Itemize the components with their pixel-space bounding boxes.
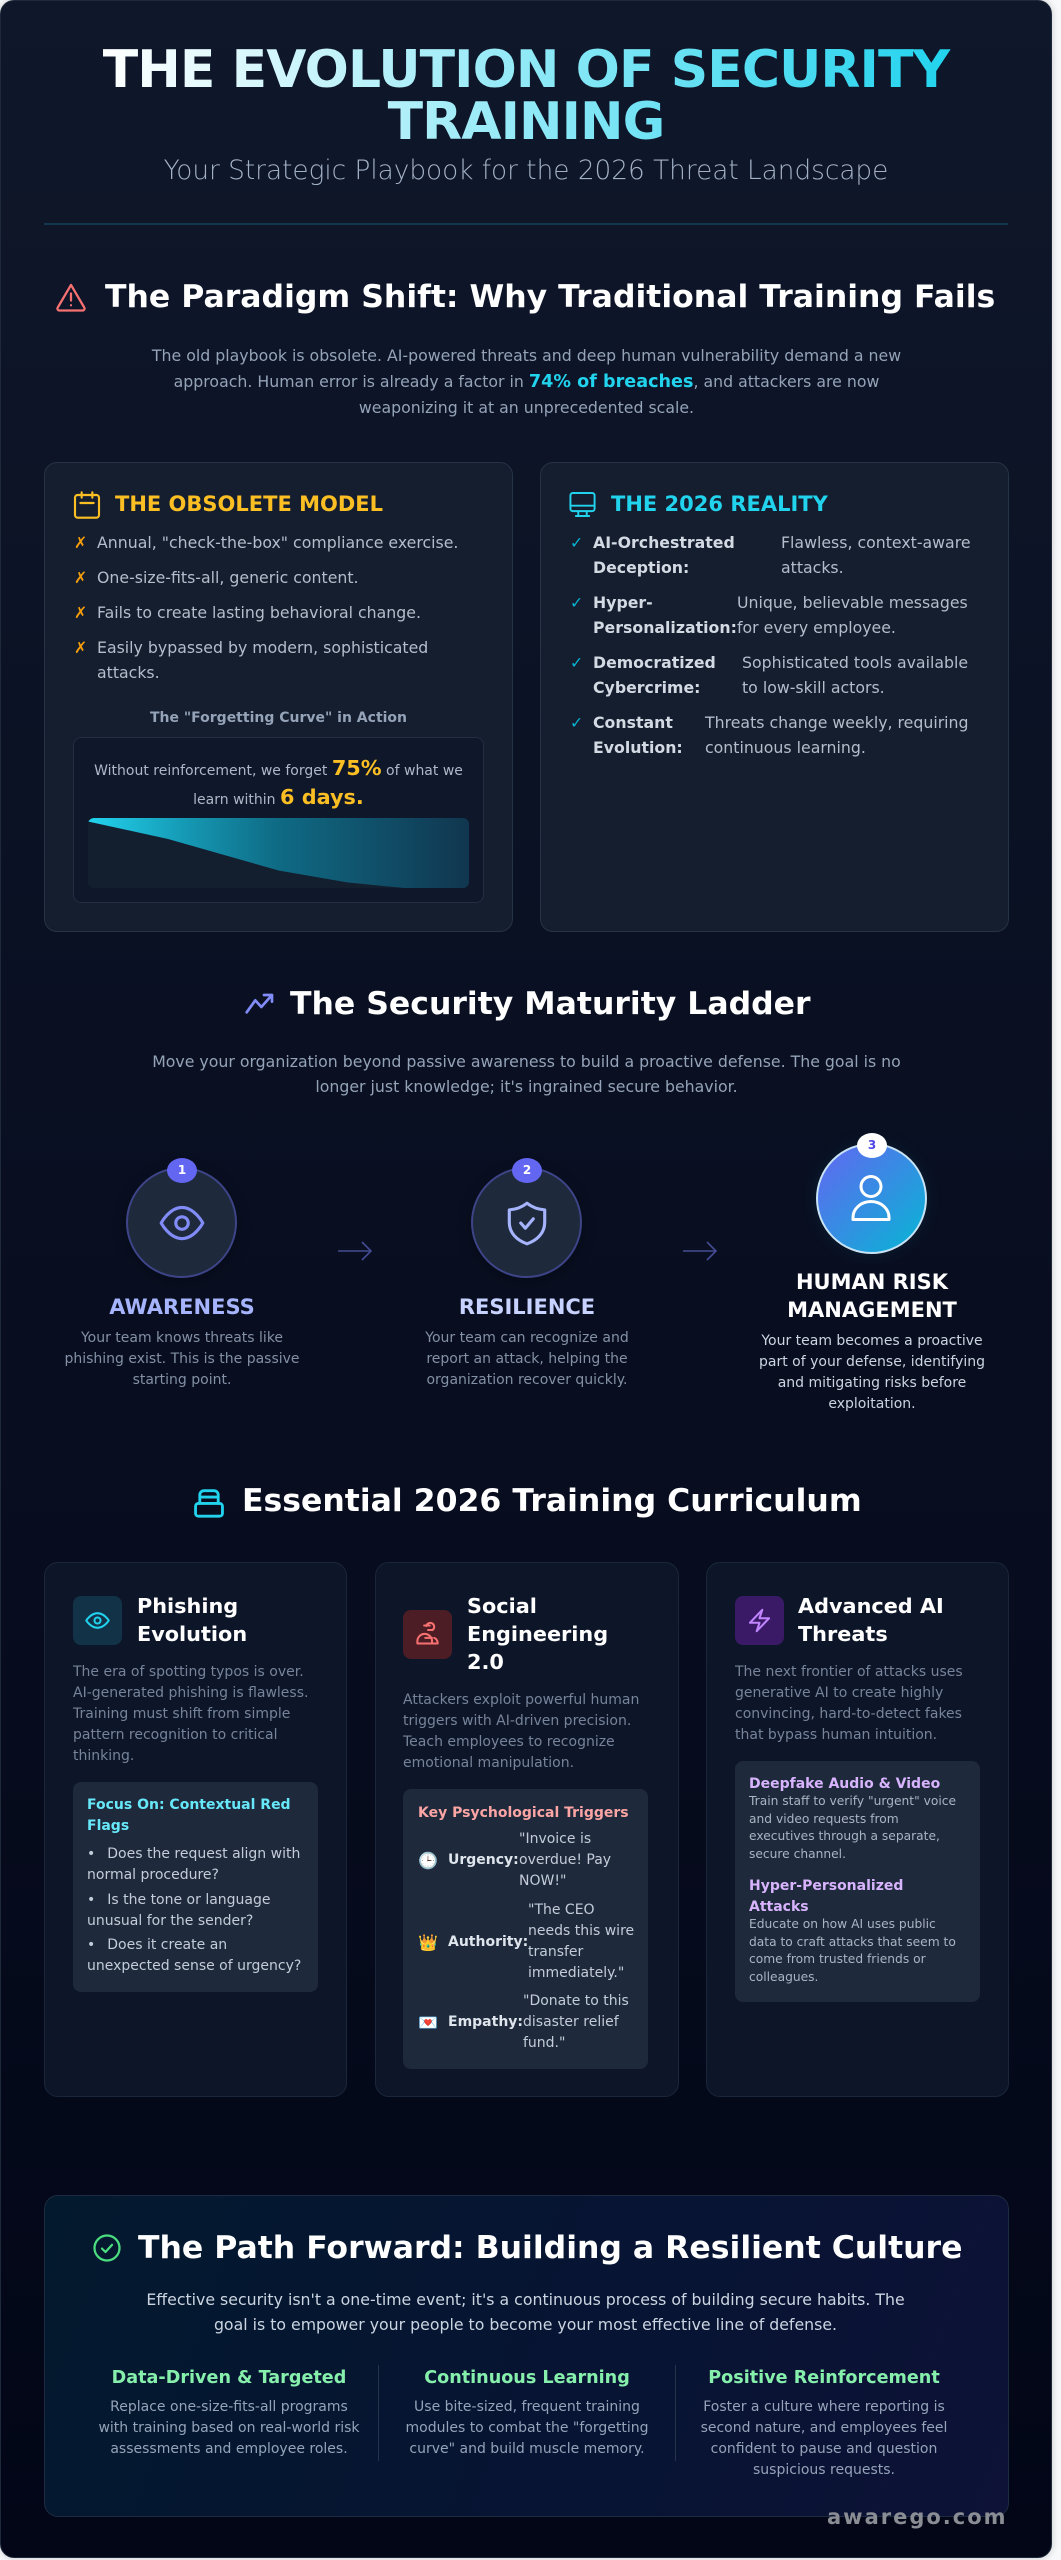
threat: deepfake: Deepfake Audio & Video <box>749 1776 940 1792</box>
threat: hyper-personalized: colleagues. <box>749 1970 818 1984</box>
card title: 2.0 <box>467 1650 504 1674</box>
description: Your team knows threats like <box>81 1330 283 1346</box>
ladder intro <box>152 1052 901 1096</box>
reality list: ✓ <box>570 653 583 672</box>
card description <box>402 1692 639 1771</box>
badge 1 <box>167 1158 197 1183</box>
intro paragraph: weaponizing it at an unprecedented scale. <box>359 398 694 417</box>
card title: Advanced AI <box>798 1594 944 1618</box>
card description: Teach employees to recognize <box>403 1734 615 1750</box>
column: data-driven <box>98 2368 360 2457</box>
focus box: unusual for the sender? <box>87 1913 253 1929</box>
arrow <box>338 1242 372 1260</box>
trigger: empathy: 💌 <box>418 2013 438 2032</box>
focus box: • Does it create an <box>87 1937 227 1953</box>
card description: that bypass human intuition. <box>735 1727 937 1743</box>
failures list: Fails to create lasting behavioral change. <box>97 603 421 622</box>
callout text: learn within 6 days. <box>193 785 364 809</box>
column: data-driven: with training based on real-world risk <box>98 2420 360 2436</box>
column: positive reinforcement: Foster a culture where reporting is <box>703 2399 945 2415</box>
icon: calendar <box>74 491 100 519</box>
circle with user icon <box>816 1143 927 1254</box>
icon: eye <box>73 1596 122 1645</box>
column: continuous learning: curve" and build muscle memory. <box>409 2441 645 2457</box>
reality list: for every employee. <box>737 618 896 636</box>
title <box>103 40 951 152</box>
trigger: empathy: "Donate to this <box>523 1993 629 2009</box>
threat: hyper-personalized: data to craft attacks that seem to <box>749 1934 956 1948</box>
ladder intro: longer just knowledge; it's ingrained secure behavior. <box>315 1077 738 1096</box>
reality list: Sophisticated tools available <box>742 653 968 672</box>
card title: Social <box>467 1594 537 1618</box>
reality list: Threats change weekly, requiring <box>705 713 969 732</box>
trigger: urgency: NOW!" <box>519 1873 566 1889</box>
trigger: authority: needs this wire <box>528 1923 634 1939</box>
column: continuous learning <box>378 2366 676 2496</box>
card description: triggers with AI-driven precision. <box>403 1713 631 1729</box>
threat: deepfake: Train staff to verify "urgent" voice <box>749 1794 956 1808</box>
description: Your team can recognize and <box>425 1330 629 1346</box>
card description: Attackers exploit powerful human <box>403 1692 639 1708</box>
badge 1: 1 <box>178 1163 186 1177</box>
card description: emotional manipulation. <box>403 1755 574 1771</box>
reality list: Evolution: <box>593 738 683 756</box>
step 3: human risk management <box>759 1133 985 1412</box>
triggers box <box>403 1789 648 2069</box>
reality list: Hyper- <box>593 593 653 612</box>
intro paragraph: The old playbook is obsolete. AI-powered threats and deep human vulnerability demand a new <box>152 346 901 365</box>
trigger: authority: transfer <box>528 1944 583 1960</box>
focus list <box>87 1846 300 1883</box>
badge 3: 3 <box>868 1138 876 1152</box>
column: data-driven: Data-Driven & Targeted <box>112 2368 346 2388</box>
title: THE EVOLUTION OF SECURITY <box>103 40 949 100</box>
card: advanced AI threats <box>706 1562 1009 2097</box>
subtitle: Your Strategic Playbook for the 2026 Threat Landscape <box>164 156 888 186</box>
path paragraph: goal is to empower your people to become your most effective line of defense. <box>214 2315 837 2334</box>
watermark: awarego.com <box>827 2505 1008 2529</box>
threat: deepfake: executives through a separate, <box>749 1829 940 1843</box>
forgetting curve title: The "Forgetting Curve" in Action <box>150 710 407 726</box>
intro paragraph <box>152 346 901 417</box>
card description <box>734 1664 963 1743</box>
column: data-driven: assessments and employee roles. <box>110 2441 348 2457</box>
panel title: THE 2026 REALITY <box>611 492 828 516</box>
description: starting point. <box>133 1372 231 1388</box>
card title <box>798 1594 944 1646</box>
trigger: empathy <box>418 1993 629 2051</box>
threat: hyper-personalized <box>749 1878 956 1984</box>
trigger: urgency <box>418 1831 611 1889</box>
title: TRAINING <box>388 92 664 152</box>
column: positive reinforcement: suspicious requests. <box>753 2462 895 2478</box>
description: Your team becomes a proactive <box>761 1333 983 1349</box>
failures list: ✗ <box>74 638 87 657</box>
description <box>425 1330 629 1388</box>
failures list: ✗ <box>74 603 87 622</box>
badge 3 <box>857 1133 887 1158</box>
trigger: authority: 👑 <box>418 1933 438 1952</box>
column: positive reinforcement: second nature, and employees feel <box>701 2420 947 2436</box>
focus title: Flags <box>87 1818 129 1834</box>
arrow <box>683 1242 717 1260</box>
description: part of your defense, identifying <box>759 1354 985 1370</box>
trigger: authority: immediately." <box>528 1965 624 1981</box>
card description: thinking. <box>73 1748 134 1764</box>
heading: paradigm shift <box>56 279 995 315</box>
reality list: ✓ <box>570 533 583 552</box>
icon: check circle <box>93 2234 121 2262</box>
callout text: Without reinforcement, we forget 75% of what we <box>94 756 463 780</box>
threat: hyper-personalized: Attacks <box>749 1899 809 1915</box>
threats box <box>735 1761 980 2002</box>
card title: Engineering <box>467 1622 608 1646</box>
focus title: Focus On: Contextual Red <box>87 1797 291 1813</box>
reality list: to low-skill actors. <box>742 678 885 696</box>
card title <box>467 1594 608 1674</box>
panel title: THE OBSOLETE MODEL <box>115 492 383 516</box>
reality list <box>570 533 971 756</box>
focus box: unexpected sense of urgency? <box>87 1958 301 1974</box>
chart: forgetting curve <box>88 818 469 888</box>
column: positive reinforcement <box>675 2366 973 2496</box>
label: RESILIENCE <box>459 1295 595 1319</box>
circle with eye icon <box>126 1167 237 1278</box>
heading: curriculum <box>194 1483 862 1519</box>
threat: deepfake <box>748 1776 956 1860</box>
trigger: urgency: 🕒 <box>418 1851 438 1870</box>
card description: generative AI to create highly <box>735 1685 943 1701</box>
heading text: The Path Forward: Building a Resilient Culture <box>138 2230 962 2266</box>
icon: warning triangle <box>56 284 86 312</box>
card description: The era of spotting typos is over. <box>73 1664 304 1680</box>
trigger: authority: "The CEO <box>528 1902 595 1918</box>
heading: maturity ladder <box>245 986 811 1022</box>
column: positive reinforcement: Positive Reinforcement <box>708 2368 940 2388</box>
card title: Evolution <box>137 1622 247 1646</box>
threat: deepfake: secure channel. <box>749 1846 846 1860</box>
forgetting curve callout <box>73 737 484 903</box>
reality list: AI-Orchestrated <box>593 533 735 552</box>
trigger: empathy: fund." <box>523 2035 565 2051</box>
heading text: The Security Maturity Ladder <box>290 986 811 1022</box>
trigger: urgency: "Invoice is <box>519 1831 591 1847</box>
card description: Training must shift from simple <box>73 1706 290 1722</box>
label: HUMAN RISK <box>796 1270 948 1294</box>
card description: The next frontier of attacks uses <box>735 1664 963 1680</box>
description <box>64 1330 300 1388</box>
threat: hyper-personalized: Educate on how AI uses public <box>749 1917 936 1931</box>
triggers title: Key Psychological Triggers <box>418 1805 629 1821</box>
trigger: urgency: Urgency: <box>448 1852 519 1868</box>
heading text: The Paradigm Shift: Why Traditional Training Fails <box>105 279 995 315</box>
failures list: One-size-fits-all, generic content. <box>97 568 359 587</box>
failures list: Annual, "check-the-box" compliance exercise. <box>97 533 458 552</box>
icon: stack <box>194 1489 224 1518</box>
card title: Threats <box>798 1622 888 1646</box>
trigger: empathy: Empathy: <box>448 2014 523 2030</box>
callout text <box>94 756 463 809</box>
path paragraph: Effective security isn't a one-time event; it's a continuous process of building secure habits. The <box>146 2290 905 2309</box>
reality list: Deception: <box>593 558 689 576</box>
card description: convincing, hard-to-detect fakes <box>735 1706 962 1722</box>
reality list: attacks. <box>781 558 844 576</box>
card description: AI-generated phishing is flawless. <box>73 1685 308 1701</box>
failures list: attacks. <box>97 662 160 682</box>
focus box <box>73 1782 318 1992</box>
focus box: • Is the tone or language <box>87 1892 271 1908</box>
focus list: normal procedure? <box>87 1867 219 1883</box>
reality list: Constant <box>593 713 673 732</box>
panel: 2026 reality <box>540 462 1009 932</box>
circle with shield icon <box>471 1167 582 1278</box>
icon: trending up <box>245 994 274 1014</box>
card: phishing evolution <box>44 1562 347 2097</box>
description: and mitigating risks before <box>778 1375 966 1391</box>
threat: hyper-personalized: Hyper-Personalized <box>749 1878 903 1894</box>
step 2: resilience <box>425 1158 629 1388</box>
ladder intro: Move your organization beyond passive awareness to build a proactive defense. The goal is no <box>152 1052 901 1071</box>
column: continuous learning: Use bite-sized, frequent training <box>414 2399 640 2415</box>
card: social engineering <box>375 1562 679 2097</box>
reality list: Personalization: <box>593 618 737 636</box>
panel: obsolete model <box>44 462 513 932</box>
card title <box>137 1594 247 1646</box>
description: phishing exist. This is the passive <box>64 1351 300 1367</box>
description: organization recover quickly. <box>426 1372 628 1388</box>
card description: pattern recognition to critical <box>73 1727 278 1743</box>
threat: deepfake: and video requests from <box>749 1812 899 1826</box>
badge 2: 2 <box>523 1163 531 1177</box>
icon: monitor <box>569 492 596 517</box>
trigger: authority <box>418 1902 634 1981</box>
reality list: Unique, believable messages <box>737 593 968 612</box>
card title: Phishing <box>137 1594 238 1618</box>
trigger: urgency: overdue! Pay <box>519 1852 611 1868</box>
intro paragraph: approach. Human error is already a factor in 74% of breaches, and attackers are now <box>174 372 879 392</box>
icon: user threat <box>403 1610 452 1659</box>
reality list: Flawless, context-aware <box>781 533 971 552</box>
icon: bolt <box>735 1596 784 1645</box>
column: positive reinforcement: confident to pause and question <box>711 2441 937 2457</box>
failures list: Easily bypassed by modern, sophisticated <box>97 638 428 657</box>
panel: path forward <box>44 2195 1009 2517</box>
failures list: ✗ <box>74 568 87 587</box>
focus title <box>87 1797 291 1834</box>
card description <box>72 1664 308 1764</box>
column: continuous learning: Continuous Learning <box>424 2368 630 2388</box>
heading: path forward <box>93 2230 962 2266</box>
description: report an attack, helping the <box>426 1351 628 1367</box>
path paragraph <box>146 2290 905 2334</box>
failures list: ✗ <box>74 533 87 552</box>
label <box>787 1270 957 1322</box>
reality list: continuous learning. <box>705 738 866 756</box>
reality list: ✓ <box>570 593 583 612</box>
focus list: • Does the request align with <box>87 1846 300 1862</box>
trigger: empathy: disaster relief <box>523 2014 619 2030</box>
description <box>759 1333 985 1412</box>
heading text: Essential 2026 Training Curriculum <box>242 1483 862 1519</box>
reality list: Cybercrime: <box>593 678 700 696</box>
failures list <box>74 533 458 682</box>
badge 2 <box>512 1158 542 1183</box>
label: AWARENESS <box>109 1295 255 1319</box>
column: data-driven: Replace one-size-fits-all programs <box>110 2399 348 2415</box>
step 1: awareness <box>64 1158 300 1388</box>
column: continuous learning: modules to combat the "forgetting <box>405 2420 649 2436</box>
trigger: authority: Authority: <box>448 1934 528 1950</box>
label: MANAGEMENT <box>787 1298 957 1322</box>
description: exploitation. <box>828 1396 916 1412</box>
threat: hyper-personalized: come from trusted friends or <box>749 1952 926 1966</box>
reality list: Democratized <box>593 653 716 672</box>
reality list: ✓ <box>570 713 583 732</box>
